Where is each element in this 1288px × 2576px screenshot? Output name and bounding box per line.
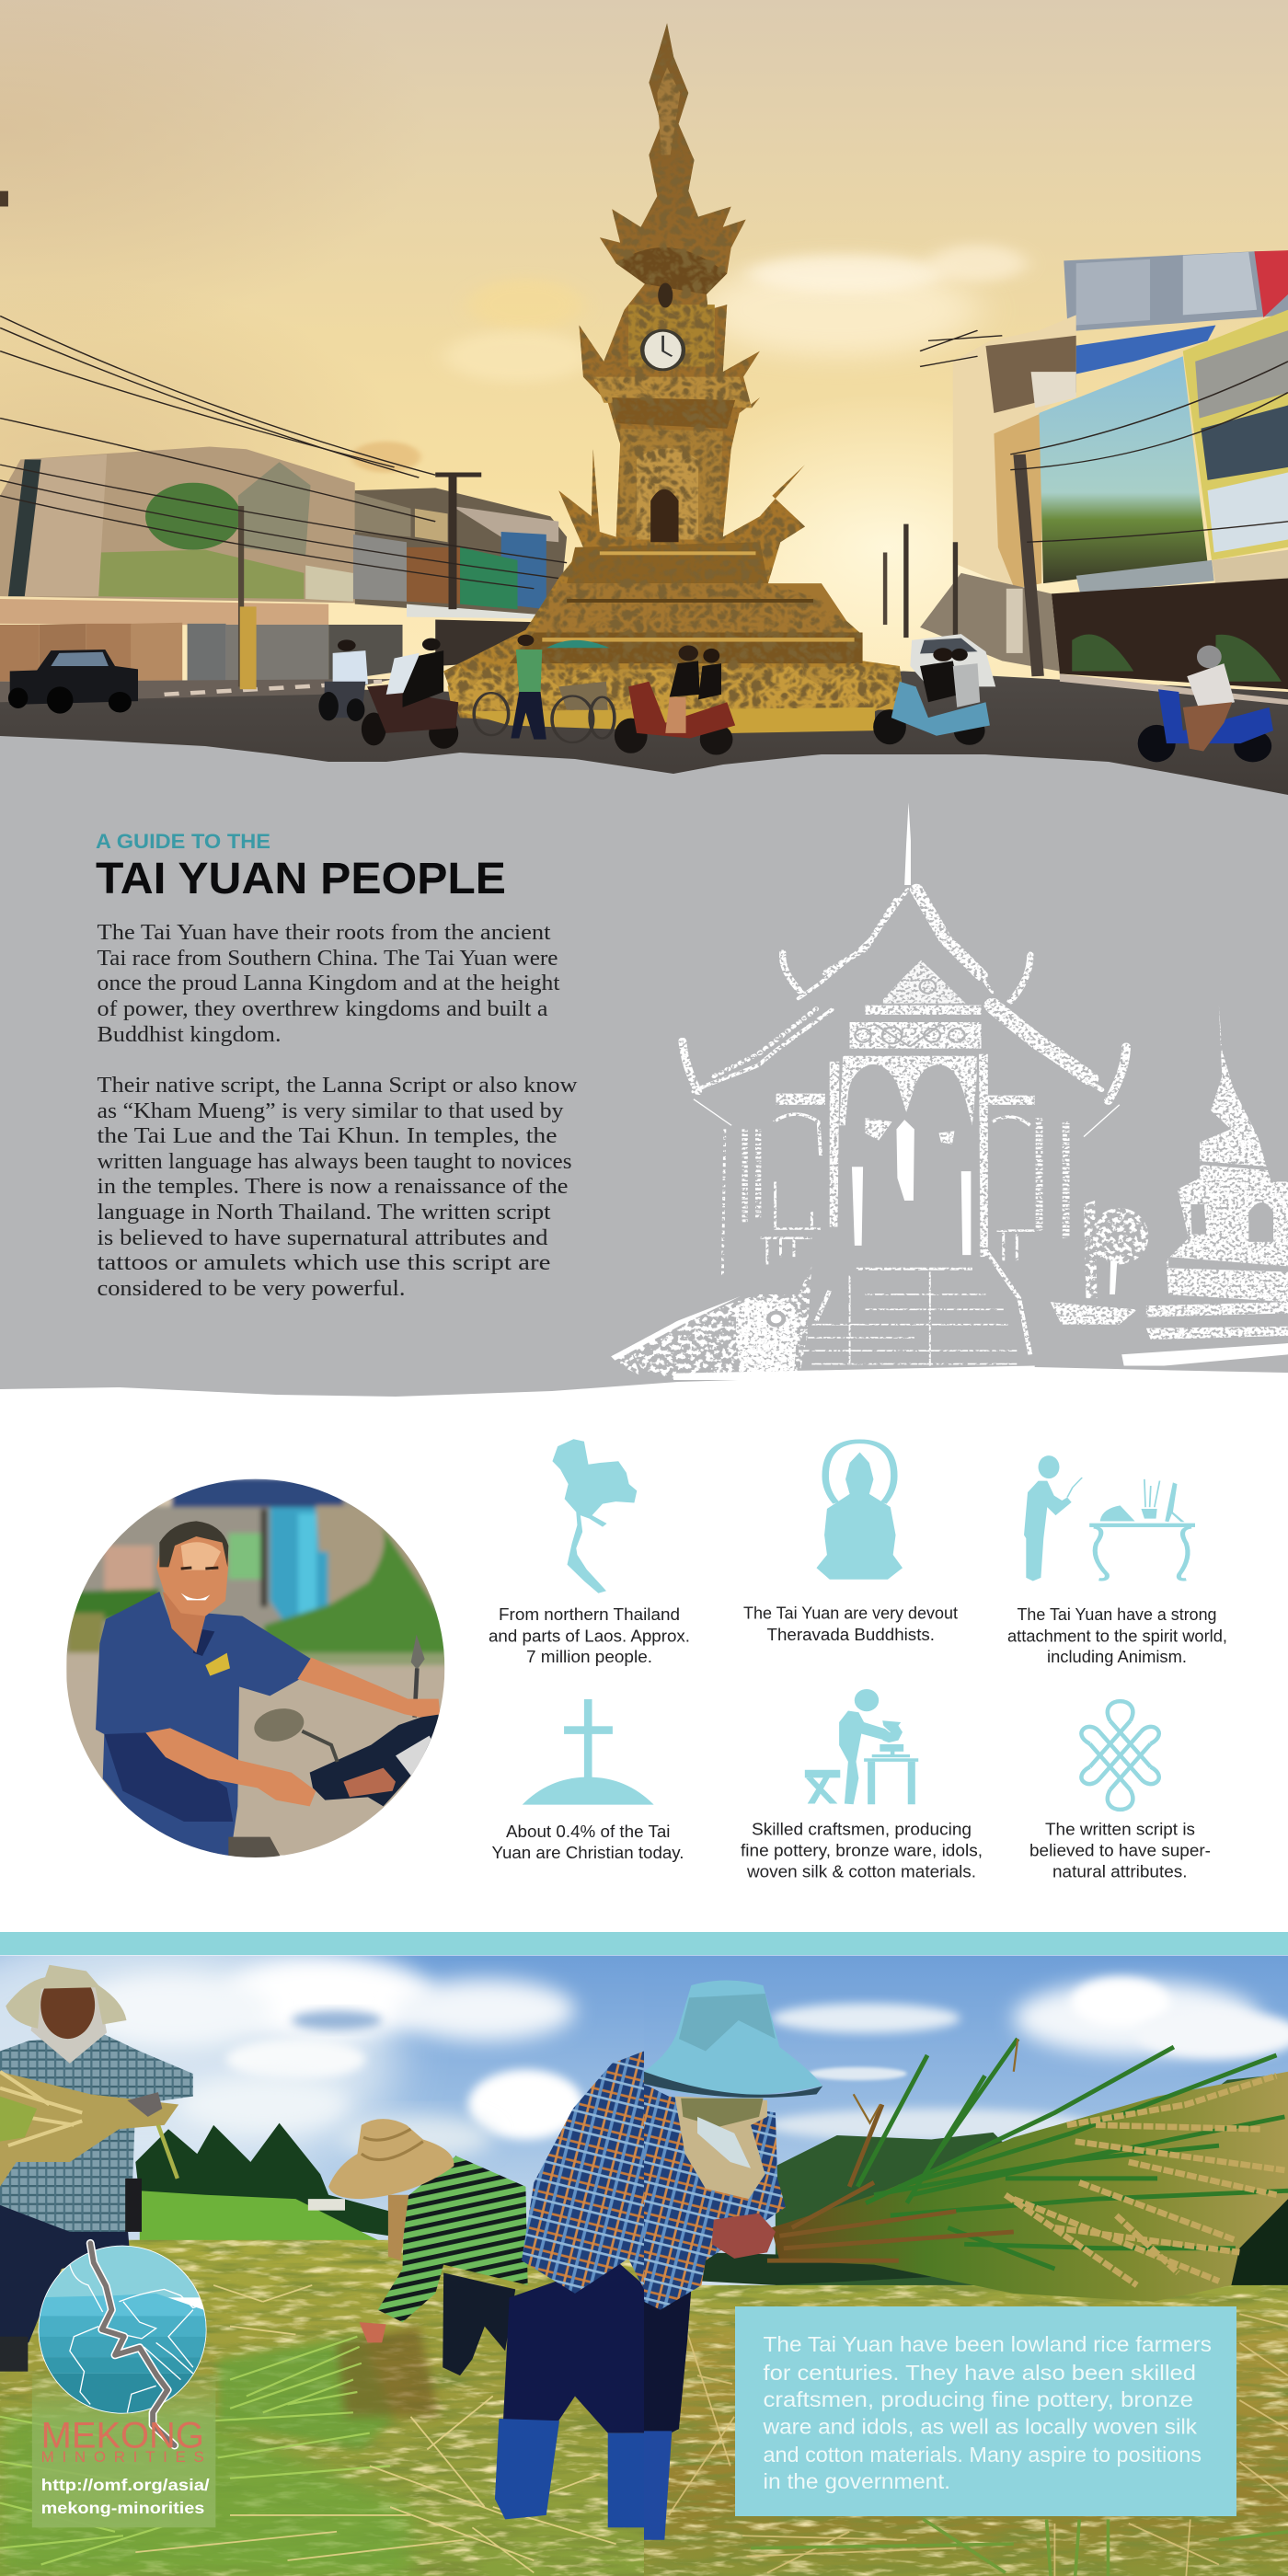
- panel: rice farmers photo, left half: [0, 1920, 644, 2576]
- caption: Theravada Buddhists: The Tai Yuan are very devout: [743, 1604, 958, 1623]
- text block: second paragraph: tattoos or amulets which use this script are: [98, 1251, 550, 1275]
- road: [0, 672, 1288, 810]
- red motorbike riders: [615, 645, 735, 754]
- trishaw and walker: [474, 635, 615, 742]
- caption: where the Tai Yuan live: From northern Thailand: [499, 1605, 680, 1624]
- text block: first paragraph: of power, they overthrew kingdoms and built a: [98, 997, 548, 1021]
- text block: second paragraph: [98, 1074, 578, 1301]
- callout: rice farmers text box: ware and idols, as well as locally woven silk: [762, 2414, 1198, 2438]
- caption: written script: [1029, 1820, 1211, 1880]
- caption: spirit world: attachment to the spirit world,: [1007, 1627, 1227, 1645]
- caption: Christians: Yuan are Christian today.: [491, 1844, 684, 1862]
- text block: first paragraph: The Tai Yuan have their roots from the ancient: [98, 921, 551, 945]
- icon: person offering incense at spirit table: [1024, 1455, 1195, 1581]
- black pickup truck: [8, 650, 138, 714]
- left buildings: [0, 446, 567, 702]
- text block: first paragraph: Tai race from Southern China. The Tai Yuan were: [98, 947, 558, 971]
- right buildings: [883, 250, 1288, 705]
- teal divider band: [0, 1932, 1288, 1955]
- Mekong river line: [90, 2243, 175, 2445]
- front farmer left half: [495, 2051, 644, 2527]
- callout: rice farmers text box: craftsmen, producing fine pottery, bronze: [764, 2387, 1193, 2411]
- text block: first paragraph: once the proud Lanna Kingdom and at the height: [98, 972, 560, 995]
- field: [644, 2285, 1288, 2576]
- icon: craftsman at pottery wheel: [805, 1689, 918, 1804]
- heading: Tai Yuan People: TAI YUAN PEOPLE: [96, 855, 506, 903]
- caption: written script: The written script is: [1045, 1820, 1195, 1838]
- scooter: [310, 1711, 439, 1806]
- website address: mekong-minorities: [41, 2499, 204, 2517]
- caption: Christians: [491, 1823, 684, 1862]
- caption: Theravada Buddhists: [743, 1604, 958, 1644]
- panel: circular portrait of a smiling man on a scooter: [62, 1478, 451, 1861]
- icon: seated Buddha with halo: [816, 1442, 903, 1580]
- arms: [145, 1728, 316, 1806]
- website address: [41, 2476, 210, 2517]
- logo wordmark: MEKONG: [41, 2414, 204, 2455]
- caption: spirit world: [1007, 1605, 1227, 1666]
- bending farmer in stripes: [328, 2119, 528, 2375]
- text block: second paragraph: as “Kham Mueng” is very similar to that used by: [98, 1099, 563, 1123]
- caption: spirit world: including Animism.: [1047, 1648, 1187, 1666]
- field: [0, 2240, 644, 2576]
- text block: first paragraph: [98, 921, 560, 1047]
- illustration: white temple silhouette: [611, 802, 1288, 1380]
- hills: [775, 2076, 1264, 2285]
- text block: second paragraph: language in North Thailand. The written script: [98, 1201, 551, 1225]
- map globe: [37, 2244, 210, 2415]
- callout: rice farmers text box: in the government.: [764, 2469, 950, 2493]
- icon: endless knot: [1081, 1701, 1159, 1810]
- text block: second paragraph: in the temples. There is now a renaissance of the: [98, 1175, 569, 1199]
- website address: http://omf.org/asia/: [41, 2476, 210, 2494]
- teal motorbike riders: [873, 648, 990, 745]
- trees and green hill: [135, 2123, 390, 2236]
- blue motorbike rider: [1138, 645, 1273, 762]
- rider one: [318, 639, 368, 721]
- front farmer right half: [644, 1980, 822, 2540]
- icon: map of Thailand: [552, 1439, 637, 1593]
- head: [163, 1592, 205, 1653]
- caption: written script: believed to have super-: [1029, 1842, 1211, 1860]
- caption: spirit world: The Tai Yuan have a strong: [1018, 1605, 1216, 1624]
- farmer with bundle on left: [0, 1965, 193, 2372]
- caption: skilled craftsmen: woven silk & cotton materials.: [746, 1862, 976, 1880]
- logo: Mekong Minorities: [32, 2243, 215, 2527]
- caption: where the Tai Yuan live: [489, 1605, 690, 1666]
- heading: a guide to the: A GUIDE TO THE: [96, 830, 270, 853]
- panel: hero photo of the golden clock tower at sunset: [0, 0, 1288, 810]
- green logo backing: [32, 2374, 215, 2527]
- caption: where the Tai Yuan live: 7 million people.: [526, 1648, 652, 1666]
- text block: second paragraph: the Tai Lue and the Tai Khun. In temples, the: [98, 1124, 558, 1148]
- rider two: [362, 638, 458, 749]
- rice bundle: [767, 2039, 1288, 2302]
- caption: where the Tai Yuan live: and parts of Laos. Approx.: [489, 1627, 690, 1645]
- panel: grey intro band with torn edges: [0, 736, 1288, 1397]
- callout: rice farmers text box: and cotton materials. Many aspire to positions: [764, 2443, 1202, 2467]
- caption: skilled craftsmen: [741, 1820, 983, 1880]
- callout: rice farmers text box: [735, 2306, 1236, 2516]
- shirt: [96, 1592, 311, 1858]
- text block: second paragraph: is believed to have supernatural attributes and: [98, 1226, 548, 1250]
- icon: cross on a hill: [523, 1699, 654, 1805]
- caption: skilled craftsmen: Skilled craftsmen, producing: [752, 1820, 972, 1838]
- white pickup: [910, 634, 995, 686]
- callout: rice farmers text box: for centuries. They have also been skilled: [764, 2361, 1196, 2385]
- text block: second paragraph: written language has always been taught to novices: [98, 1150, 572, 1174]
- street vehicles and riders: [8, 634, 1273, 762]
- power lines: [0, 316, 1288, 589]
- panel: rice farmers photo, right half: [644, 1955, 1288, 2576]
- caption: written script: natural attributes.: [1052, 1862, 1187, 1880]
- caption: Theravada Buddhists: Theravada Buddhists.: [767, 1626, 935, 1644]
- caption: skilled craftsmen: fine pottery, bronze ware, idols,: [741, 1842, 983, 1860]
- text block: first paragraph: Buddhist kingdom.: [98, 1023, 282, 1047]
- text block: second paragraph: Their native script, the Lanna Script or also know: [98, 1074, 578, 1098]
- caption: Christians: About 0.4% of the Tai: [506, 1823, 670, 1841]
- golden clock tower: [443, 23, 903, 733]
- text block: second paragraph: considered to be very powerful.: [98, 1277, 405, 1301]
- logo wordmark: MINORITIES: [41, 2448, 204, 2466]
- callout: rice farmers text box: The Tai Yuan have been lowland rice farmers: [764, 2332, 1212, 2356]
